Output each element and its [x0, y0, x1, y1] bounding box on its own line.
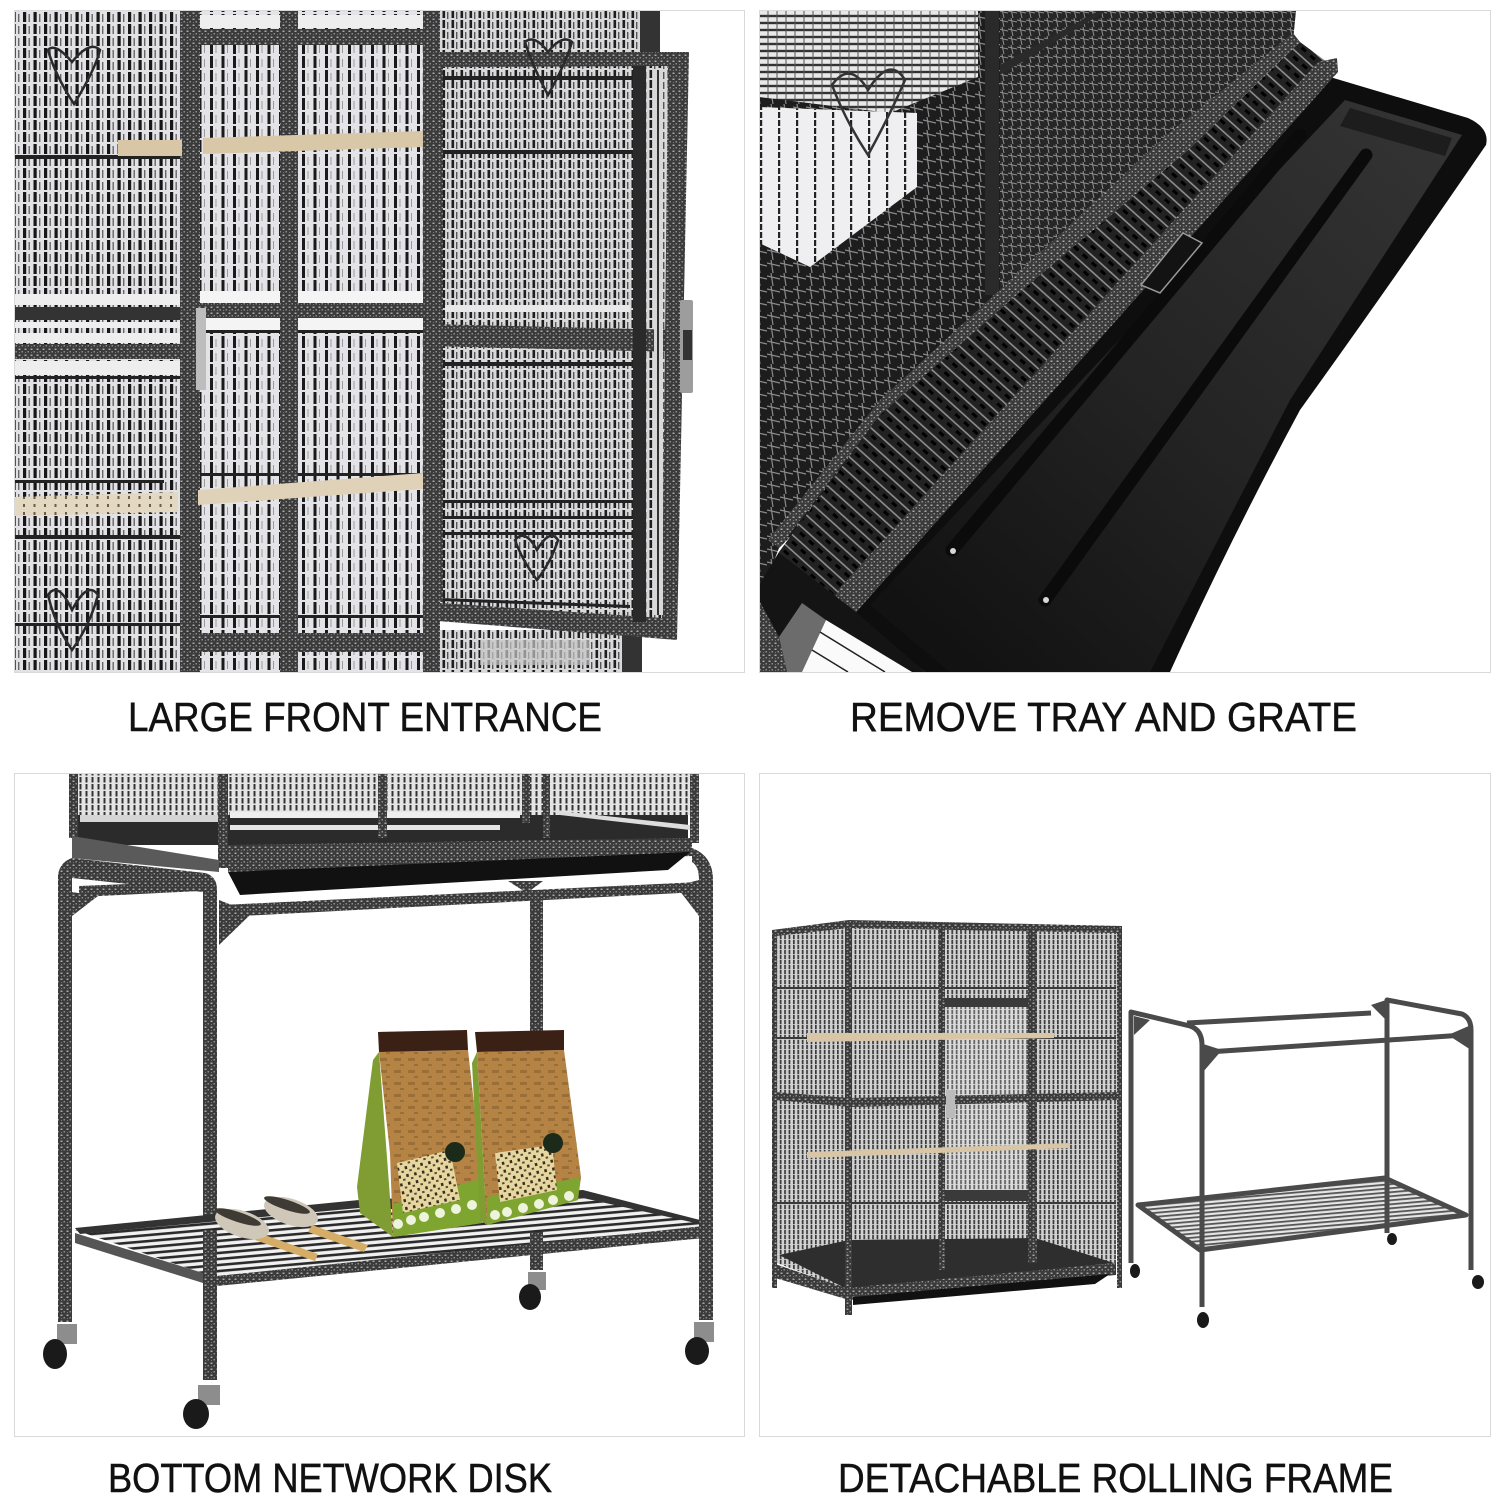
wooden perches: [14, 130, 462, 516]
door handle bar: [196, 308, 206, 390]
inner speckled rail: [768, 33, 1300, 548]
tray ridges: [952, 135, 1366, 600]
bottom grate: [779, 42, 1327, 598]
central door frame: [180, 10, 440, 672]
cage body: [772, 920, 1122, 1315]
panel: large front entrance photo: [14, 10, 744, 672]
detached stand: [1130, 1000, 1484, 1328]
door frame: [425, 52, 689, 640]
grate handle: [1141, 233, 1202, 293]
panel: remove tray and grate photo: [759, 10, 1490, 672]
panel: detachable rolling frame photo: [759, 773, 1490, 1436]
caption: remove tray and grate: REMOVE TRAY AND GRATE: [850, 694, 1357, 740]
wire shelf: [75, 1190, 699, 1286]
centre door horizontal rails: [198, 15, 425, 618]
left bag: [357, 1030, 484, 1237]
door latch: [680, 300, 693, 393]
brushes on shelf: [211, 1191, 368, 1261]
open door: [425, 52, 689, 640]
cage latch: [946, 1090, 955, 1118]
left cage shelves and wires: [14, 155, 180, 626]
heart feeder: [832, 70, 905, 155]
pull-out tray: [228, 852, 690, 895]
panel: bottom network disk photo: [14, 773, 744, 1436]
cage bars background: [14, 10, 660, 672]
cage frame: [772, 920, 1122, 1315]
caption: large front entrance: LARGE FRONT ENTRANCE: [128, 694, 602, 740]
black removable tray: [779, 77, 1487, 672]
cage perches: [807, 1033, 1054, 1042]
caption: detachable rolling frame: DETACHABLE ROLLING FRAME: [838, 1455, 1393, 1500]
finer rear mesh: [1000, 10, 1296, 290]
white barred view: [759, 107, 917, 267]
cage post: [985, 10, 1108, 295]
lower cage corner: [759, 552, 925, 672]
heart feeders: [48, 40, 572, 650]
food bags: [357, 1030, 581, 1237]
right bag: [472, 1030, 581, 1225]
cage posts: [69, 773, 699, 868]
cage wires: [776, 987, 1116, 1204]
caption: bottom network disk: BOTTOM NETWORK DISK: [108, 1455, 552, 1500]
cage floor: [779, 1238, 1114, 1290]
cage tray: [853, 1274, 1110, 1305]
stand shelf: [1138, 1178, 1466, 1250]
upper white mesh view: [759, 10, 978, 113]
rolling stand: [58, 848, 713, 1222]
outer speckled rail: [835, 58, 1338, 612]
dark wire mesh cage: [759, 10, 1296, 600]
door window highlight: [947, 1005, 1027, 1190]
cage bottom bars: [72, 773, 692, 845]
door wires: [440, 76, 640, 608]
stand casters: [1130, 1264, 1140, 1278]
cage base: [72, 836, 692, 872]
casters: [43, 1272, 714, 1429]
